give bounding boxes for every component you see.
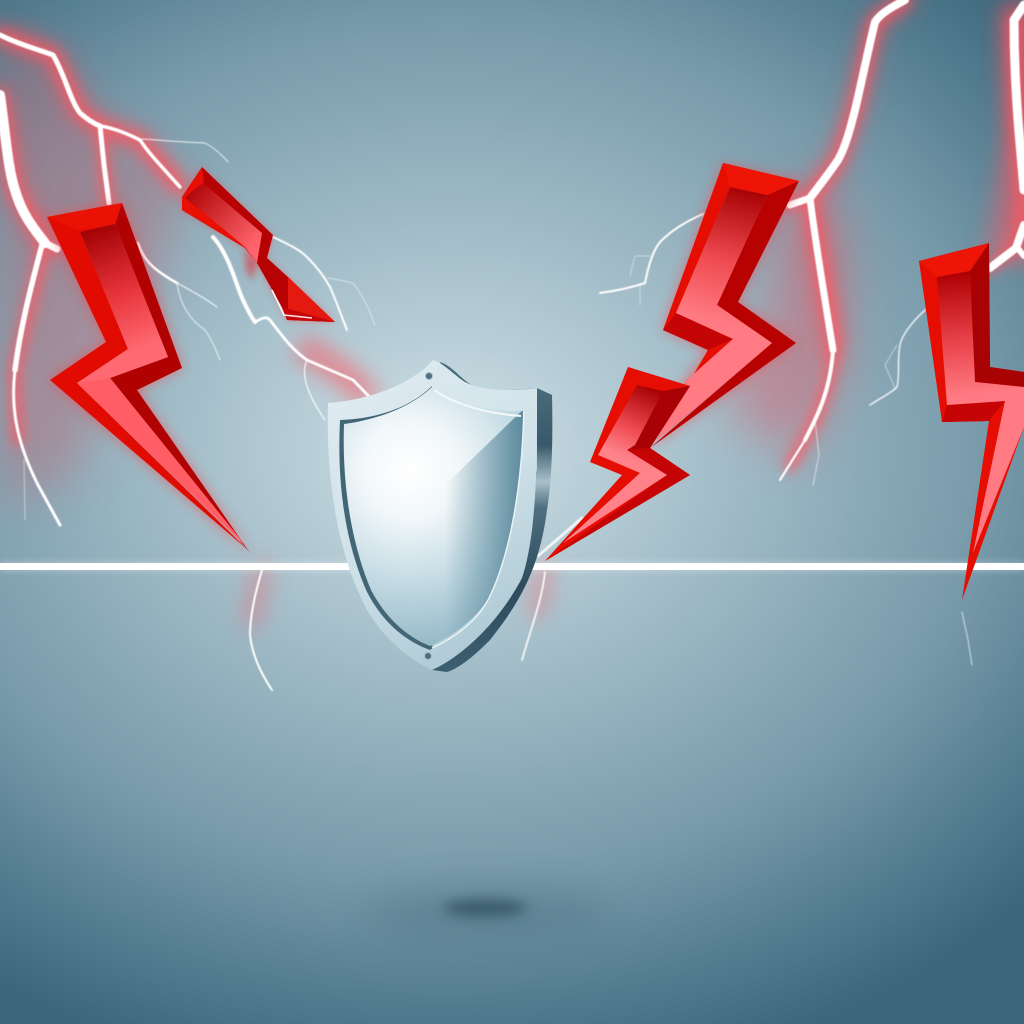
floor shadow bbox=[365, 886, 605, 938]
red bolt: right small bbox=[545, 367, 690, 561]
arc: far-right main bbox=[990, 5, 1024, 268]
lightning glow haze bbox=[0, 0, 1024, 620]
arc: upper-left main bbox=[0, 35, 228, 203]
red bolt: small upper-left bbox=[182, 167, 335, 322]
arc: beside shield bbox=[522, 518, 582, 660]
arc: far-right thin bbox=[870, 310, 972, 665]
arc: behind left bolt bbox=[138, 243, 220, 360]
haze: right region bbox=[720, 170, 850, 460]
red bolt: far right bbox=[919, 243, 1024, 600]
shield: inner bevel bbox=[339, 386, 433, 650]
arc: from small bolt to shield bbox=[213, 237, 375, 420]
haze: lightning strokes bbox=[0, 0, 1024, 465]
red bolt: right large bbox=[650, 163, 799, 448]
shield bbox=[328, 360, 552, 672]
arc: far-left main bbox=[0, 95, 60, 525]
lightning bolts: thin white arcs bbox=[0, 0, 1024, 690]
shield: diagonal sheen bbox=[450, 411, 523, 632]
red bolt: left bbox=[47, 203, 250, 553]
arc: lower-left under horizon bbox=[250, 570, 272, 690]
shield: front rim bbox=[328, 360, 537, 670]
haze: left region bbox=[0, 30, 180, 500]
horizon line bbox=[0, 562, 1024, 571]
shield: lower bevel highlight bbox=[432, 412, 524, 648]
haze: far-right region bbox=[985, 0, 1024, 270]
arc: right main bbox=[780, 0, 905, 485]
shield: bottom rivet bbox=[424, 652, 432, 660]
shield: polished face bbox=[344, 387, 523, 646]
shield: top rivet bbox=[426, 372, 432, 380]
haze: under-horizon arcs bbox=[252, 570, 545, 620]
haze: near shield arc bbox=[300, 345, 372, 400]
shield: highlight line bbox=[434, 390, 521, 416]
arc: left of right bolt bbox=[600, 214, 703, 305]
shield: side thickness bbox=[432, 362, 552, 672]
